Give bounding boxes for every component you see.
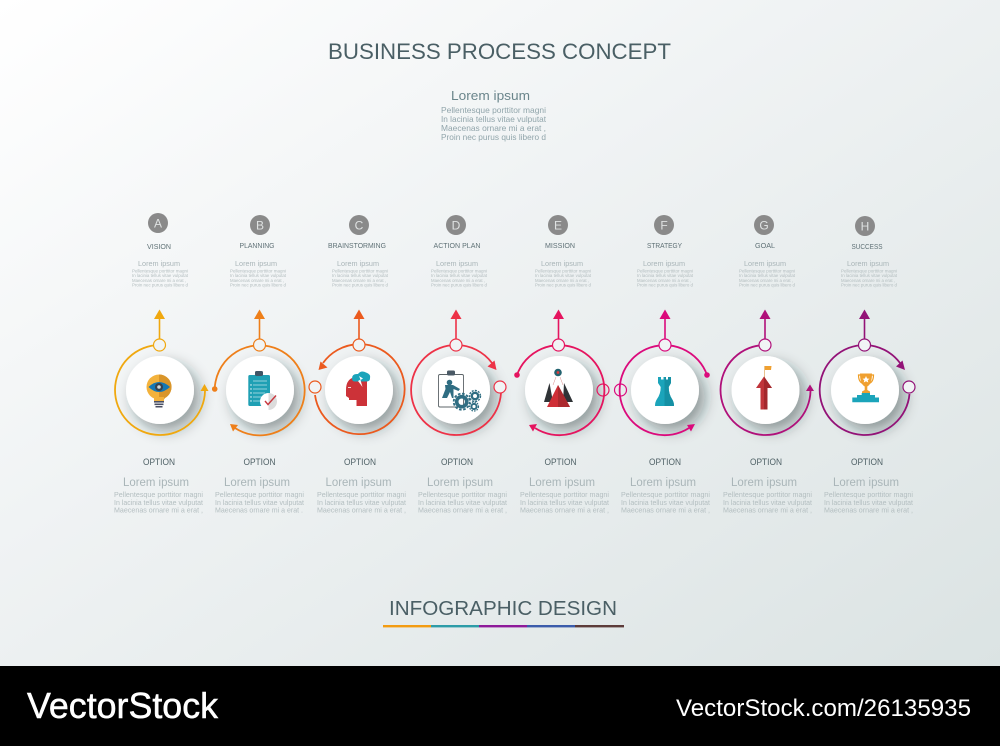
icon: mountains with target	[544, 369, 573, 407]
option column C: Lorem ipsum	[326, 477, 392, 489]
option column E: In lacinia tellus vitae vulputat	[520, 498, 610, 507]
header column G: goal: Proin nec purus quis libero d	[739, 282, 795, 288]
header column A: vision: Pellentesque porttitor magni	[132, 268, 188, 274]
option column G: In lacinia tellus vitae vulputat	[723, 498, 813, 507]
option column C	[317, 457, 407, 514]
option column C: Maecenas ornare mi a erat ,	[317, 506, 406, 514]
header column C: brainstorming: C	[355, 218, 364, 232]
header column A: vision: Maecenas ornare mi a erat ,	[132, 278, 186, 284]
header column E: mission: Lorem ipsum	[541, 259, 583, 268]
option column G	[723, 457, 813, 514]
intro text block: Proin nec purus quis libero d	[441, 132, 546, 142]
title: BUSINESS PROCESS CONCEPT	[328, 39, 671, 64]
option column B: In lacinia tellus vitae vulputat	[215, 498, 305, 507]
watermark band	[0, 666, 1000, 746]
icon: clipboard with check	[248, 371, 277, 410]
option column H: Pellentesque porttitor magni	[824, 490, 913, 499]
option column D	[418, 457, 508, 514]
step G ring and icon	[721, 310, 814, 435]
intro text block: Pellentesque porttitor magni	[441, 105, 546, 115]
header column B: planning: Lorem ipsum	[235, 259, 277, 268]
option column A: Pellentesque porttitor magni	[114, 490, 203, 499]
option column A	[114, 457, 204, 514]
option column B	[215, 457, 305, 514]
icon: red arrow with flag	[756, 366, 772, 410]
header column G: goal: GOAL	[755, 243, 775, 250]
intro text block: Maecenas ornare mi a erat ,	[441, 123, 546, 133]
header column F: strategy: F	[660, 218, 668, 232]
option column D: Pellentesque porttitor magni	[418, 490, 507, 499]
header column C: brainstorming: Pellentesque porttitor magni	[332, 268, 388, 274]
header column C: brainstorming: In lacinia tellus vitae vulputat	[332, 273, 389, 279]
header column F: strategy: Pellentesque porttitor magni	[637, 268, 693, 274]
option column F: In lacinia tellus vitae vulputat	[621, 498, 711, 507]
option column G: OPTION	[750, 457, 782, 467]
header column A: vision	[132, 213, 189, 288]
option column H: Maecenas ornare mi a erat ,	[824, 506, 913, 514]
header column F: strategy: Lorem ipsum	[643, 259, 685, 268]
header column F: strategy: Maecenas ornare mi a erat ,	[637, 278, 691, 284]
header column H: success: Pellentesque porttitor magni	[841, 268, 897, 274]
header column D: action plan: Pellentesque porttitor magni	[431, 268, 487, 274]
step H ring and icon	[820, 310, 915, 435]
header column F: strategy: STRATEGY	[647, 243, 682, 250]
option column E: Maecenas ornare mi a erat ,	[520, 506, 609, 514]
header column C: brainstorming: Proin nec purus quis libero d	[332, 282, 388, 288]
icon: presenter with gears	[438, 370, 480, 411]
header column B: planning	[230, 215, 287, 288]
header column H: success: Lorem ipsum	[847, 259, 889, 268]
icon: chess rook	[655, 377, 674, 406]
header column D: action plan: Maecenas ornare mi a erat ,	[431, 278, 485, 284]
option column C: OPTION	[344, 457, 376, 467]
step E ring and icon	[514, 310, 609, 435]
step D ring and icon	[411, 310, 506, 435]
header column E: mission: Proin nec purus quis libero d	[535, 282, 591, 288]
option column A: In lacinia tellus vitae vulputat	[114, 498, 204, 507]
watermark band: VectorStock.com/26135935	[676, 695, 971, 722]
option column H: In lacinia tellus vitae vulputat	[824, 498, 914, 507]
step B ring and icon	[212, 310, 305, 435]
option column E: Lorem ipsum	[529, 477, 595, 489]
header column B: planning: Pellentesque porttitor magni	[230, 268, 286, 274]
option column E	[520, 457, 610, 514]
header column A: vision: Proin nec purus quis libero d	[132, 282, 188, 288]
header column D: action plan: Proin nec purus quis libero d	[431, 282, 487, 288]
option column B: Pellentesque porttitor magni	[215, 490, 304, 499]
header column B: planning: Proin nec purus quis libero d	[230, 282, 286, 288]
option column B: OPTION	[244, 457, 276, 467]
header column F: strategy	[637, 215, 694, 288]
option column C: In lacinia tellus vitae vulputat	[317, 498, 407, 507]
header column D: action plan: ACTION PLAN	[434, 243, 480, 250]
header column E: mission: MISSION	[545, 243, 575, 250]
header column B: planning: Maecenas ornare mi a erat ,	[230, 278, 284, 284]
intro text block	[441, 88, 547, 142]
option column A: Maecenas ornare mi a erat ,	[114, 506, 203, 514]
step A ring and icon	[115, 310, 208, 435]
header column B: planning: PLANNING	[240, 243, 274, 250]
header column A: vision: A	[154, 216, 162, 230]
intro text block: Lorem ipsum	[451, 88, 530, 103]
header column B: planning: In lacinia tellus vitae vulputat	[230, 273, 287, 279]
intro text block: In lacinia tellus vitae vulputat	[441, 114, 547, 124]
header column A: vision: VISION	[147, 244, 171, 251]
header column G: goal	[739, 215, 796, 288]
option column D: Lorem ipsum	[427, 477, 493, 489]
header column C: brainstorming: Maecenas ornare mi a erat ,	[332, 278, 386, 284]
option column F: Lorem ipsum	[630, 477, 696, 489]
header column D: action plan: Lorem ipsum	[436, 259, 478, 268]
header column D: action plan: In lacinia tellus vitae vulputat	[431, 273, 488, 279]
option column F: Maecenas ornare mi a erat ,	[621, 506, 710, 514]
header column G: goal: Lorem ipsum	[744, 259, 786, 268]
header column F: strategy: Proin nec purus quis libero d	[637, 282, 693, 288]
header column A: vision: In lacinia tellus vitae vulputat	[132, 273, 189, 279]
option column G: Lorem ipsum	[731, 477, 797, 489]
header column G: goal: Pellentesque porttitor magni	[739, 268, 795, 274]
header column D: action plan	[431, 215, 488, 288]
header column B: planning: B	[256, 218, 264, 232]
option column H: Lorem ipsum	[833, 477, 899, 489]
header column H: success: SUCCESS	[852, 244, 883, 251]
header column C: brainstorming: BRAINSTORMING	[328, 243, 386, 250]
option column A: Lorem ipsum	[123, 477, 189, 489]
option column G: Pellentesque porttitor magni	[723, 490, 812, 499]
watermark band: VectorStock	[27, 685, 219, 726]
option column B: Maecenas ornare mi a erat .	[215, 506, 303, 514]
header column A: vision: Lorem ipsum	[138, 259, 180, 268]
option column F: OPTION	[649, 457, 681, 467]
option column F: Pellentesque porttitor magni	[621, 490, 710, 499]
header column C: brainstorming: Lorem ipsum	[337, 259, 379, 268]
header column E: mission: In lacinia tellus vitae vulputat	[535, 273, 592, 279]
header column F: strategy: In lacinia tellus vitae vulputat	[637, 273, 694, 279]
option column E: Pellentesque porttitor magni	[520, 490, 609, 499]
option column D: In lacinia tellus vitae vulputat	[418, 498, 508, 507]
step F ring and icon	[614, 310, 710, 435]
header column H: success: Maecenas ornare mi a erat ,	[841, 278, 895, 284]
header column H: success: H	[861, 220, 869, 234]
header column H: success: Proin nec purus quis libero d	[841, 282, 897, 288]
option column G: Maecenas ornare mi a erat ,	[723, 506, 812, 514]
header column H: success: In lacinia tellus vitae vulputat	[841, 273, 898, 279]
option column B: Lorem ipsum	[224, 477, 290, 489]
icon: light bulb with eye	[146, 374, 172, 408]
footer heading: INFOGRAPHIC DESIGN	[389, 598, 617, 620]
option column E: OPTION	[544, 457, 576, 467]
option column A: OPTION	[143, 457, 175, 467]
header column G: goal: G	[759, 218, 769, 232]
option column D: OPTION	[441, 457, 473, 467]
header column D: action plan: D	[452, 218, 461, 232]
option column H	[824, 457, 914, 514]
header column E: mission: Pellentesque porttitor magni	[535, 268, 591, 274]
option column C: Pellentesque porttitor magni	[317, 490, 406, 499]
header column E: mission: Maecenas ornare mi a erat ,	[535, 278, 589, 284]
header column C: brainstorming	[328, 215, 389, 288]
header column G: goal: Maecenas ornare mi a erat ,	[739, 278, 793, 284]
colour bar	[383, 625, 624, 627]
option column D: Maecenas ornare mi a erat ,	[418, 506, 507, 514]
icon: head with cloud	[346, 372, 370, 406]
header column G: goal: In lacinia tellus vitae vulputat	[739, 273, 796, 279]
header column E: mission	[535, 215, 592, 288]
header column E: mission: E	[554, 218, 562, 232]
option column H: OPTION	[851, 457, 883, 467]
icon: trophy on podium	[852, 374, 879, 402]
header column H: success	[841, 216, 898, 288]
step C ring and icon	[309, 310, 405, 434]
option column F	[621, 457, 711, 514]
